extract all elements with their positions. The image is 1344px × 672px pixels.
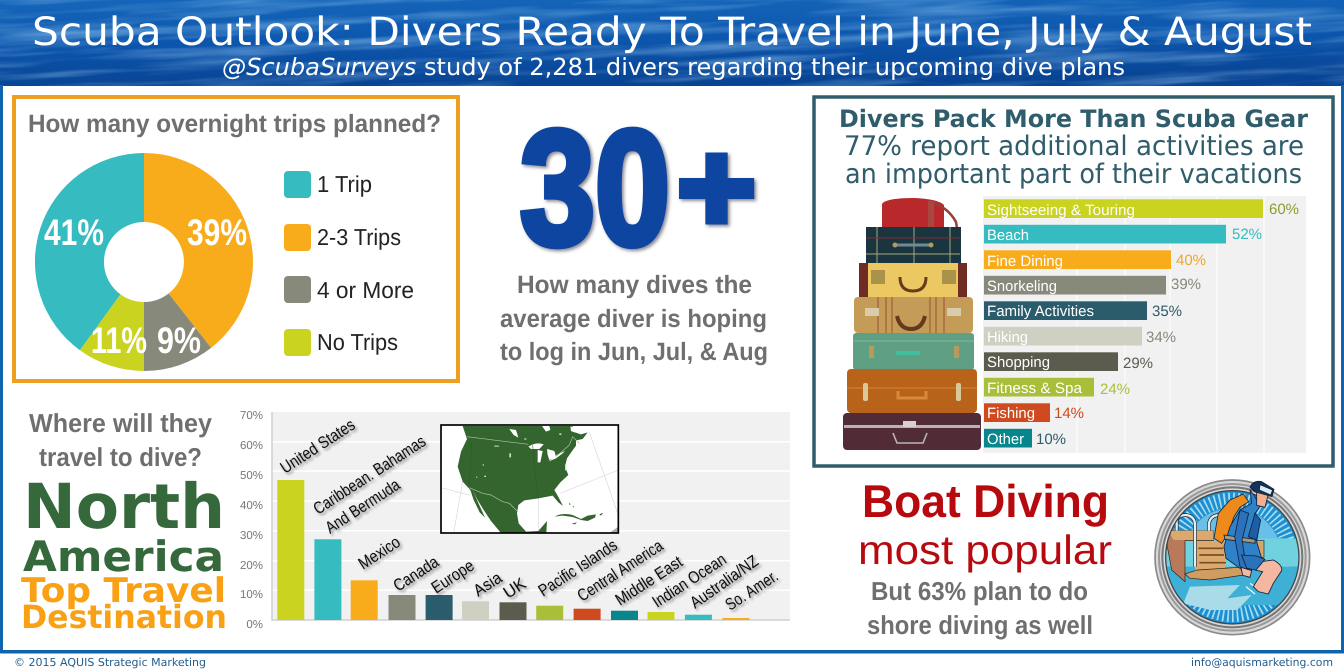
destination labels: So. Amer.	[722, 566, 782, 614]
destination labels: Indian Ocean	[649, 550, 730, 611]
bar chart: activities: 35%	[1152, 303, 1182, 320]
callout: North America top travel destination: Destination	[21, 598, 227, 636]
donut legend: 4 or More	[317, 277, 414, 303]
activities heading: 77% report additional activities are	[844, 131, 1304, 162]
destination labels: Caribbean. Bahamas	[310, 432, 429, 518]
icon: diver on boat	[1155, 480, 1310, 635]
callout: North America top travel destination: America	[23, 532, 224, 581]
y axis labels: 10%	[240, 589, 263, 601]
donut chart: 39%	[187, 212, 247, 253]
bar chart: activities: 14%	[1054, 405, 1084, 422]
text: boat diving: shore diving as well	[867, 610, 1093, 640]
destination bars	[277, 480, 749, 620]
destination labels: And Bermuda	[322, 475, 404, 537]
bar chart: activities: Snorkeling	[987, 278, 1057, 295]
destination labels: Europe	[428, 556, 478, 597]
activities heading: Divers Pack More Than Scuba Gear	[839, 105, 1308, 133]
bar chart: activities: 24%	[1100, 381, 1130, 398]
bar chart: activities: Fitness & Spa	[987, 380, 1083, 397]
bar chart: activities: Shopping	[987, 354, 1050, 371]
dives caption: How many dives the	[517, 271, 752, 299]
bar chart: activities: Sightseeing & Touring	[987, 202, 1135, 219]
header banner	[0, 0, 1344, 86]
bar chart: activities	[983, 196, 1306, 453]
heading: trips: How many overnight trips planned?	[28, 110, 441, 138]
bar chart: activities: Fishing	[987, 405, 1035, 422]
footer: copyright: © 2015 AQUIS Strategic Marketing	[14, 656, 206, 669]
bar chart: activities: Other	[987, 431, 1024, 448]
activities heading: an important part of their vacations	[845, 159, 1302, 190]
heading: where will they travel: travel to dive?	[39, 442, 202, 472]
bar chart: activities: Family Activities	[987, 303, 1094, 320]
panel: overnight trips	[14, 97, 458, 381]
donut chart	[35, 153, 253, 371]
bar chart: activities: Hiking	[987, 329, 1028, 346]
bar chart: activities: Fine Dining	[987, 253, 1063, 270]
activities heading	[839, 105, 1308, 190]
subtitle: @ScubaSurveys study of 2,281 divers regarding their upcoming dive plans	[222, 53, 1125, 81]
heading: where will they travel: Where will they	[29, 408, 213, 438]
text: boat diving: But 63% plan to do	[871, 576, 1088, 606]
destination labels: Asia	[470, 568, 506, 600]
text: boat diving: most popular	[858, 527, 1112, 573]
bar chart: activities: 52%	[1232, 226, 1262, 243]
destination labels: Middle East	[612, 552, 686, 609]
bar chart: activities: 40%	[1176, 252, 1206, 269]
donut chart: 41%	[44, 212, 104, 253]
donut chart: 11%	[91, 320, 147, 361]
donut legend: 2-3 Trips	[317, 224, 401, 250]
dives caption: average diver is hoping	[500, 305, 767, 333]
y axis labels: 70%	[240, 410, 263, 422]
destination labels: United States	[277, 415, 358, 477]
destination labels: Central America	[574, 536, 667, 605]
dives caption: to log in Jun, Jul, & Aug	[500, 338, 768, 366]
text: boat diving	[858, 475, 1112, 640]
bar chart: activities: 10%	[1036, 431, 1066, 448]
y axis labels	[240, 410, 263, 631]
destination labels: Australia/NZ	[686, 551, 762, 612]
heading: where will they travel	[29, 408, 213, 472]
destination labels	[277, 415, 782, 614]
dives caption	[500, 271, 768, 366]
diver figure	[1214, 481, 1282, 594]
title: Scuba Outlook: Divers Ready To Travel in June, July & August	[32, 10, 1312, 55]
callout: North America top travel destination	[21, 470, 227, 636]
donut legend: 1 Trip	[317, 171, 372, 197]
bar chart: destinations	[240, 410, 790, 631]
destination labels: Pacific Islands	[535, 535, 621, 600]
donut chart: 9%	[157, 320, 201, 361]
y axis labels: 20%	[240, 560, 263, 572]
callout: North America top travel destination: Top Travel	[21, 571, 226, 611]
destination labels: Mexico	[355, 532, 404, 573]
bar chart: activities: 60%	[1269, 201, 1299, 218]
big number 30+: 30	[520, 96, 670, 279]
bar chart: activities: 34%	[1146, 329, 1176, 346]
icon: stack of suitcases	[843, 198, 981, 450]
y axis labels: 0%	[246, 619, 263, 631]
donut legend: No Trips	[317, 329, 398, 355]
donut legend	[284, 171, 414, 356]
y axis labels: 30%	[240, 530, 263, 542]
y axis labels: 50%	[240, 470, 263, 482]
big number 30+: +	[677, 116, 756, 259]
callout: North America top travel destination: North	[23, 470, 225, 543]
y axis labels: 60%	[240, 440, 263, 452]
map: North America	[441, 425, 618, 533]
footer: contact email: info@aquismarketing.com	[1191, 656, 1333, 669]
panel: activities	[814, 97, 1333, 466]
bar chart: activities: 39%	[1171, 276, 1201, 293]
destination labels: Canada	[390, 552, 442, 595]
bar chart: activities: Beach	[987, 227, 1029, 244]
destination labels: UK	[500, 574, 530, 602]
text: boat diving: Boat Diving	[862, 475, 1109, 527]
y axis labels: 40%	[240, 500, 263, 512]
bar chart: activities: 29%	[1123, 355, 1153, 372]
